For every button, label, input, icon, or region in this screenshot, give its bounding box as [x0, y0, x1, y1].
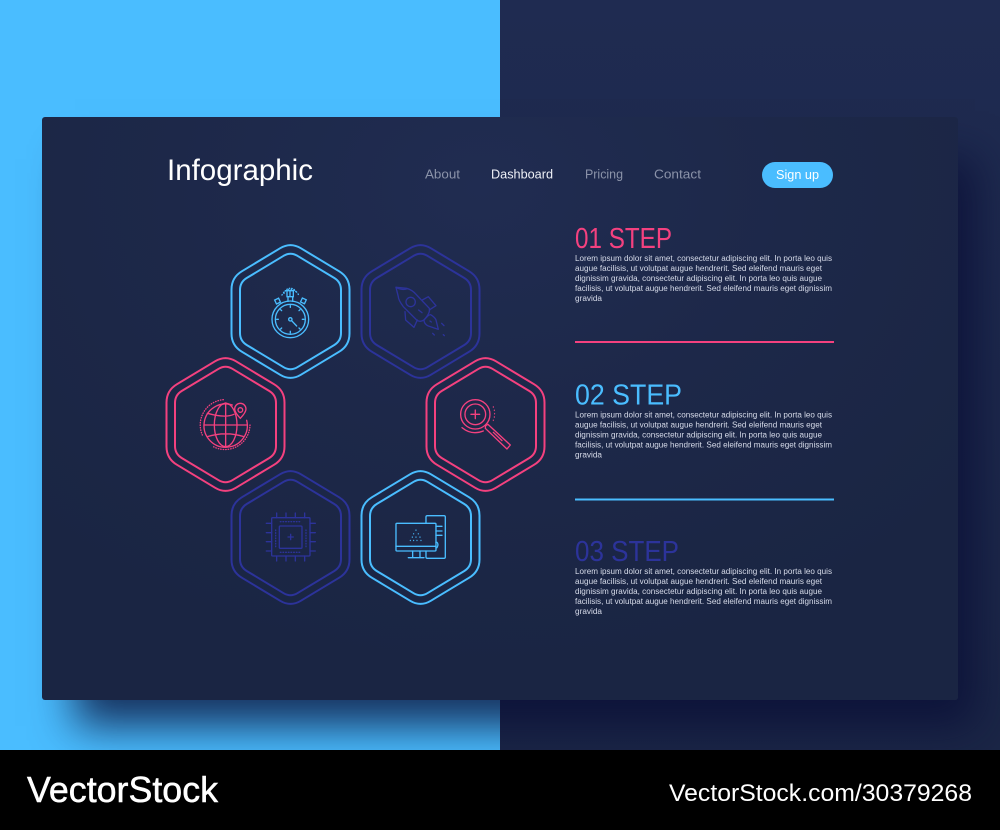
step 02 text: augue facilisis, ut volutpat augue hendrerit. Sed eleifend mauris eget: [575, 420, 823, 430]
step 03 text: gravida: [575, 607, 603, 616]
step 02 text: gravida: [575, 450, 603, 460]
icon: stopwatch: [272, 288, 309, 338]
hexagon: microchip: [232, 471, 350, 604]
step 01 text: augue facilisis, ut volutpat augue hendrerit. Sed eleifend mauris eget: [575, 264, 823, 273]
hexagon: globe: [166, 358, 284, 491]
step 01 heading: 01 STEP: [575, 223, 672, 255]
step 02 text: facilisis, ut volutpat augue hendrerit. Sed eleifend mauris eget dignissim: [575, 440, 832, 450]
icon: rocket: [396, 287, 444, 336]
step 02 block: [575, 380, 832, 460]
step 02 heading: 02 STEP: [575, 380, 682, 412]
step 03 text: dignissim gravida, consectetur adipiscing elit. In porta leo quis augue: [575, 587, 823, 596]
sign up button: [762, 162, 833, 188]
hexagon: stopwatch: [232, 245, 350, 378]
sign up button: Sign up: [776, 167, 819, 182]
icon: magnifying glass: [461, 400, 510, 449]
step 01 text: Lorem ipsum dolor sit amet, consectetur adipiscing elit. In porta leo quis: [575, 254, 832, 263]
step 02 text: [575, 410, 832, 460]
step 01 text: dignissim gravida, consectetur adipiscing elit. In porta leo quis augue: [575, 274, 823, 283]
icon: microchip: [266, 513, 315, 561]
panel: dashboard card: [42, 117, 958, 700]
navigation menu: [425, 166, 701, 182]
footer logo text: VectorStock: [27, 769, 219, 810]
step 01 text: facilisis, ut volutpat augue hendrerit. Sed eleifend mauris eget dignissim: [575, 284, 832, 293]
divider: pink: [575, 341, 834, 343]
step 03 text: augue facilisis, ut volutpat augue hendrerit. Sed eleifend mauris eget: [575, 577, 823, 586]
footer: watermark bar: [0, 750, 1000, 830]
nav: Pricing: Pricing: [585, 166, 623, 182]
step 03 heading: 03 STEP: [575, 536, 679, 568]
background: left blue half: [0, 0, 500, 750]
step 01 text: [575, 254, 832, 303]
hexagon: rocket: [362, 245, 480, 378]
nav: About: About: [425, 166, 460, 182]
hexagon: computer: [362, 471, 480, 604]
step 03 text: facilisis, ut volutpat augue hendrerit. Sed eleifend mauris eget dignissim: [575, 597, 832, 606]
background: right navy half: [500, 0, 1000, 750]
icon: globe with location pin: [200, 400, 250, 450]
step 03 block: [575, 536, 832, 616]
icon: desktop computer: [396, 516, 445, 558]
footer image id: VectorStock.com/30379268: [669, 780, 972, 807]
step 02 text: Lorem ipsum dolor sit amet, consectetur adipiscing elit. In porta leo quis: [575, 410, 832, 420]
step 01 block: [575, 223, 832, 303]
divider: blue: [575, 498, 834, 500]
hexagon: magnifier: [426, 358, 544, 491]
step 03 text: Lorem ipsum dolor sit amet, consectetur adipiscing elit. In porta leo quis: [575, 567, 832, 576]
title: Infographic: [167, 154, 313, 187]
step 02 text: dignissim gravida, consectetur adipiscing elit. In porta leo quis augue: [575, 430, 823, 440]
step 01 text: gravida: [575, 294, 603, 303]
nav: Contact: Contact: [654, 166, 701, 182]
nav: Dashboard: Dashboard: [491, 166, 553, 182]
step 03 text: [575, 567, 832, 616]
